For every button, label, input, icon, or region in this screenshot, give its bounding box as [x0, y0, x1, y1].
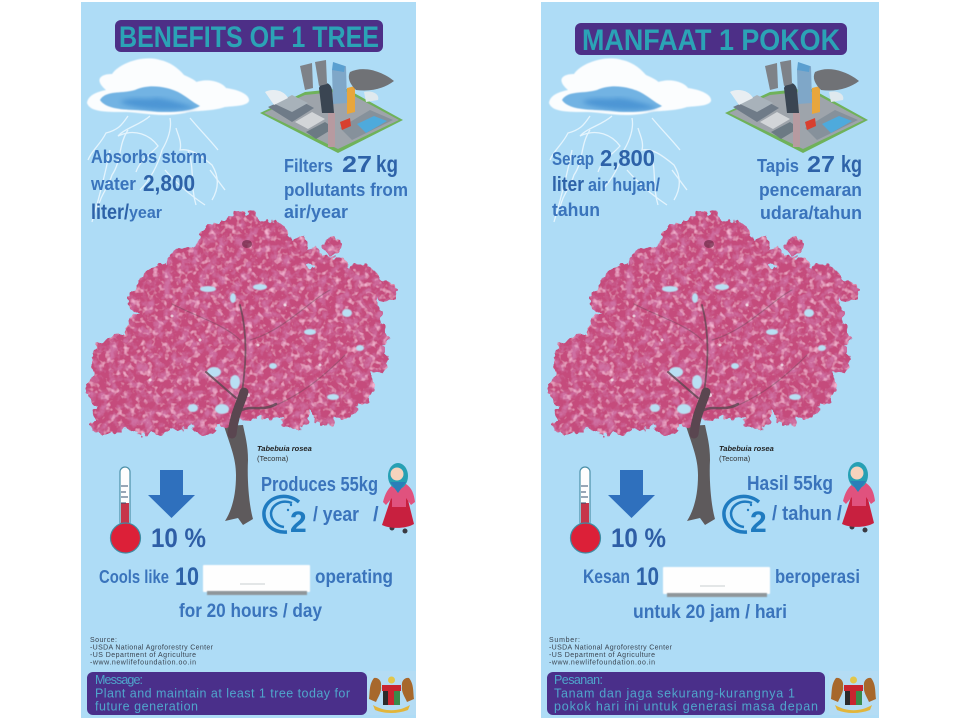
caption: species name: Tabebuia rosea: [257, 444, 312, 453]
icon: O2: [724, 496, 767, 539]
icon: factory: [260, 60, 403, 153]
caption: species name: Tabebuia rosea: [719, 444, 774, 453]
panel: Malay poster: [541, 2, 879, 718]
icon: storm cloud with lightning: [87, 58, 249, 222]
icon: down arrow: [608, 470, 655, 518]
text: air hujan: Serap: [552, 149, 594, 169]
source list: [90, 637, 214, 666]
text: air hujan: 2,800: [600, 145, 655, 171]
source list: -www.newlifefoundation.oo.in: [90, 660, 196, 666]
panel: English poster: [81, 2, 416, 718]
text: storm water: [90, 147, 207, 224]
text: produces oxygen: /: [373, 504, 379, 526]
source list: -USDA National Agroforestry Center: [90, 644, 214, 652]
text: kesan penyejukan: untuk 20 jam / hari: [633, 602, 787, 623]
text: tapis pencemaran: [757, 151, 862, 223]
text: filters pollutants: air/year: [284, 202, 348, 222]
icon: thermometer: [570, 467, 600, 553]
text: kesan penyejukan: Kesan: [583, 567, 630, 588]
text: filters pollutants: pollutants from: [284, 180, 408, 200]
text: air hujan: air hujan/: [588, 175, 660, 195]
stat: 10 percent: 10 %: [151, 523, 206, 553]
text: kesan penyejukan: 10: [636, 563, 659, 591]
illustration: pink tree: [86, 212, 397, 525]
text: hasil oksigen: / tahun /: [772, 503, 842, 525]
text: cools like air conditioners: operating: [315, 567, 393, 588]
source list: Source:: [90, 637, 117, 644]
caption: species name: (Tecoma): [719, 454, 751, 463]
text: hasil oksigen: Hasil 55kg: [747, 473, 833, 495]
text: air hujan: tahun: [552, 200, 600, 220]
icon: air conditioner: [203, 565, 310, 595]
icon: girl: [382, 463, 415, 534]
caption: species name: [719, 444, 774, 463]
title: manfaat 1 pokok: MANFAAT 1 POKOK: [582, 24, 840, 57]
text: storm water: Absorbs storm: [91, 147, 207, 167]
icon: factory: [725, 60, 868, 153]
text: tapis pencemaran: 27: [807, 151, 835, 177]
message box: Tanam dan jaga sekurang-kurangnya 1: [554, 686, 795, 700]
stat: 10 percent: 10 %: [611, 523, 666, 553]
text: air hujan: [552, 145, 660, 220]
text: air hujan: liter: [552, 174, 584, 196]
icon: down arrow: [148, 470, 195, 518]
source list: -USDA National Agroforestry Center: [549, 644, 673, 652]
source list: -www.newlifefoundation.oo.in: [549, 660, 655, 666]
text: filters pollutants: 27: [342, 151, 372, 177]
text: storm water: water: [90, 174, 136, 194]
icon: coat of arms: [367, 671, 416, 715]
text: kesan penyejukan: beroperasi: [775, 567, 860, 588]
message box: Plant and maintain at least 1 tree today for: [95, 686, 350, 700]
text: filters pollutants: Filters: [284, 156, 333, 176]
icon: air conditioner: [663, 567, 770, 597]
text: storm water: year: [129, 203, 162, 222]
icon: coat of arms: [829, 671, 878, 715]
text: kesan penyejukan: [583, 563, 860, 623]
message box: future generation: [95, 700, 198, 714]
source list: Sumber:: [549, 637, 580, 644]
icon: girl: [842, 462, 875, 532]
text: cools like air conditioners: 10: [175, 563, 199, 591]
text: produces oxygen: [261, 474, 379, 526]
illustration: pink tree: [548, 212, 859, 525]
text: produces oxygen: Produces 55kg: [261, 474, 378, 496]
caption: species name: (Tecoma): [257, 454, 289, 463]
text: cools like air conditioners: [99, 563, 393, 622]
text: tapis pencemaran: pencemaran: [759, 180, 862, 200]
icon: thermometer: [110, 467, 140, 553]
caption: species name: [257, 444, 312, 463]
source list: -US Department of Agriculture: [549, 652, 655, 659]
text: cools like air conditioners: Cools like: [99, 567, 169, 587]
message box: pokok hari ini untuk generasi masa depan: [554, 700, 818, 714]
text: filters pollutants: kg: [376, 151, 398, 177]
text: filters pollutants: [284, 151, 408, 222]
text: tapis pencemaran: Tapis: [757, 156, 799, 176]
text: tapis pencemaran: kg: [841, 151, 862, 177]
text: storm water: liter/: [91, 201, 129, 224]
message box: [87, 672, 367, 715]
icon: storm cloud with lightning: [549, 58, 711, 222]
source list: [549, 637, 673, 666]
text: tapis pencemaran: udara/tahun: [760, 203, 862, 223]
message box: Pesanan:: [554, 673, 603, 687]
icon: O2: [264, 496, 307, 539]
message box: [547, 672, 825, 715]
text: storm water: 2,800: [143, 170, 195, 196]
source list: -US Department of Agriculture: [90, 652, 196, 659]
title: benefits of 1 tree: BENEFITS OF 1 TREE: [119, 21, 379, 54]
message box: Message:: [95, 673, 143, 687]
text: cools like air conditioners: for 20 hours / day: [179, 601, 322, 622]
text: hasil oksigen: [747, 473, 842, 525]
text: produces oxygen: / year: [313, 504, 359, 526]
